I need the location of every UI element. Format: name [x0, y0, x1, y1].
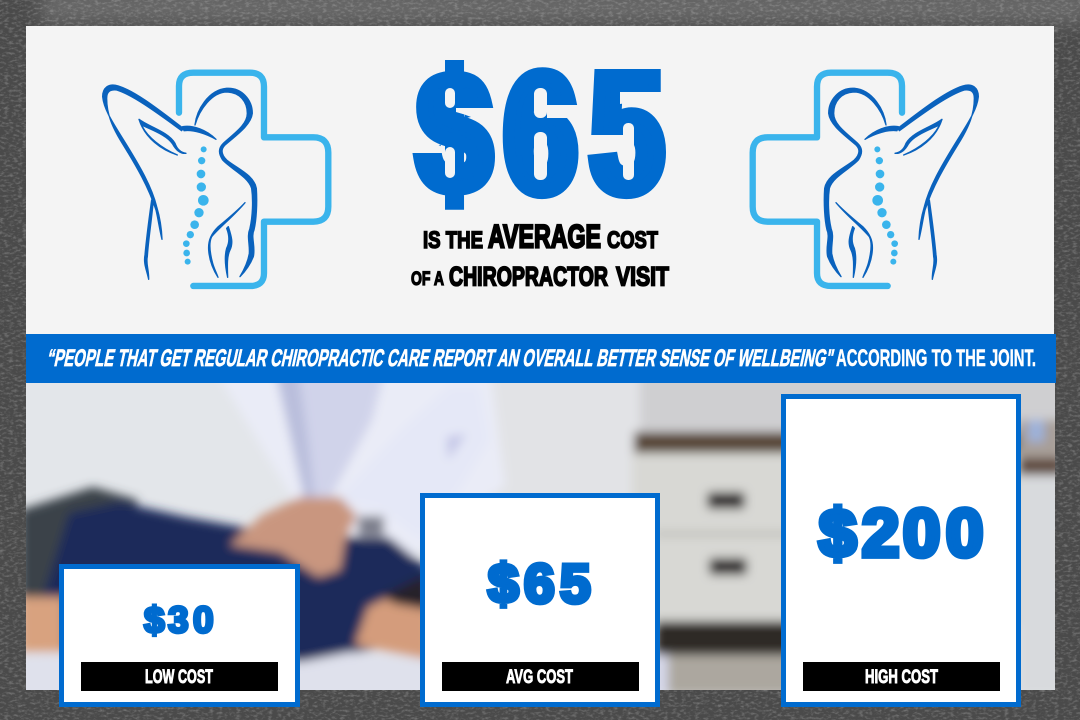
subheading line 1	[423, 218, 658, 254]
label: high cost	[803, 662, 1000, 691]
label: low cost: LOW COST	[145, 667, 213, 688]
subheading line 1: COST	[607, 227, 658, 254]
panel: blurred treatment photo	[20, 370, 1070, 700]
subheading line 1: AVERAGE	[488, 218, 601, 254]
label: low cost	[81, 662, 278, 691]
subheading line 2: OF A	[411, 269, 444, 290]
label: avg cost	[442, 662, 639, 691]
price: $30: $30	[144, 600, 214, 640]
card: low cost	[62, 566, 298, 704]
label: high cost: HIGH COST	[865, 667, 938, 688]
headline price: $65	[418, 41, 664, 225]
icon: spine and medical cross, left	[103, 73, 328, 286]
card: average cost	[422, 496, 658, 704]
price: $200: $200	[819, 496, 983, 571]
icon: spine and medical cross, right	[753, 73, 978, 286]
subheading line 2: VISIT	[616, 262, 669, 292]
quote banner	[26, 334, 1056, 383]
label: avg cost: AVG COST	[506, 667, 573, 688]
price: $65: $65	[488, 552, 591, 614]
card: high cost	[784, 396, 1018, 704]
panel: header	[26, 26, 1054, 336]
subheading line 1: IS THE	[423, 227, 483, 254]
subheading line 2: CHIROPRACTOR	[449, 262, 608, 292]
